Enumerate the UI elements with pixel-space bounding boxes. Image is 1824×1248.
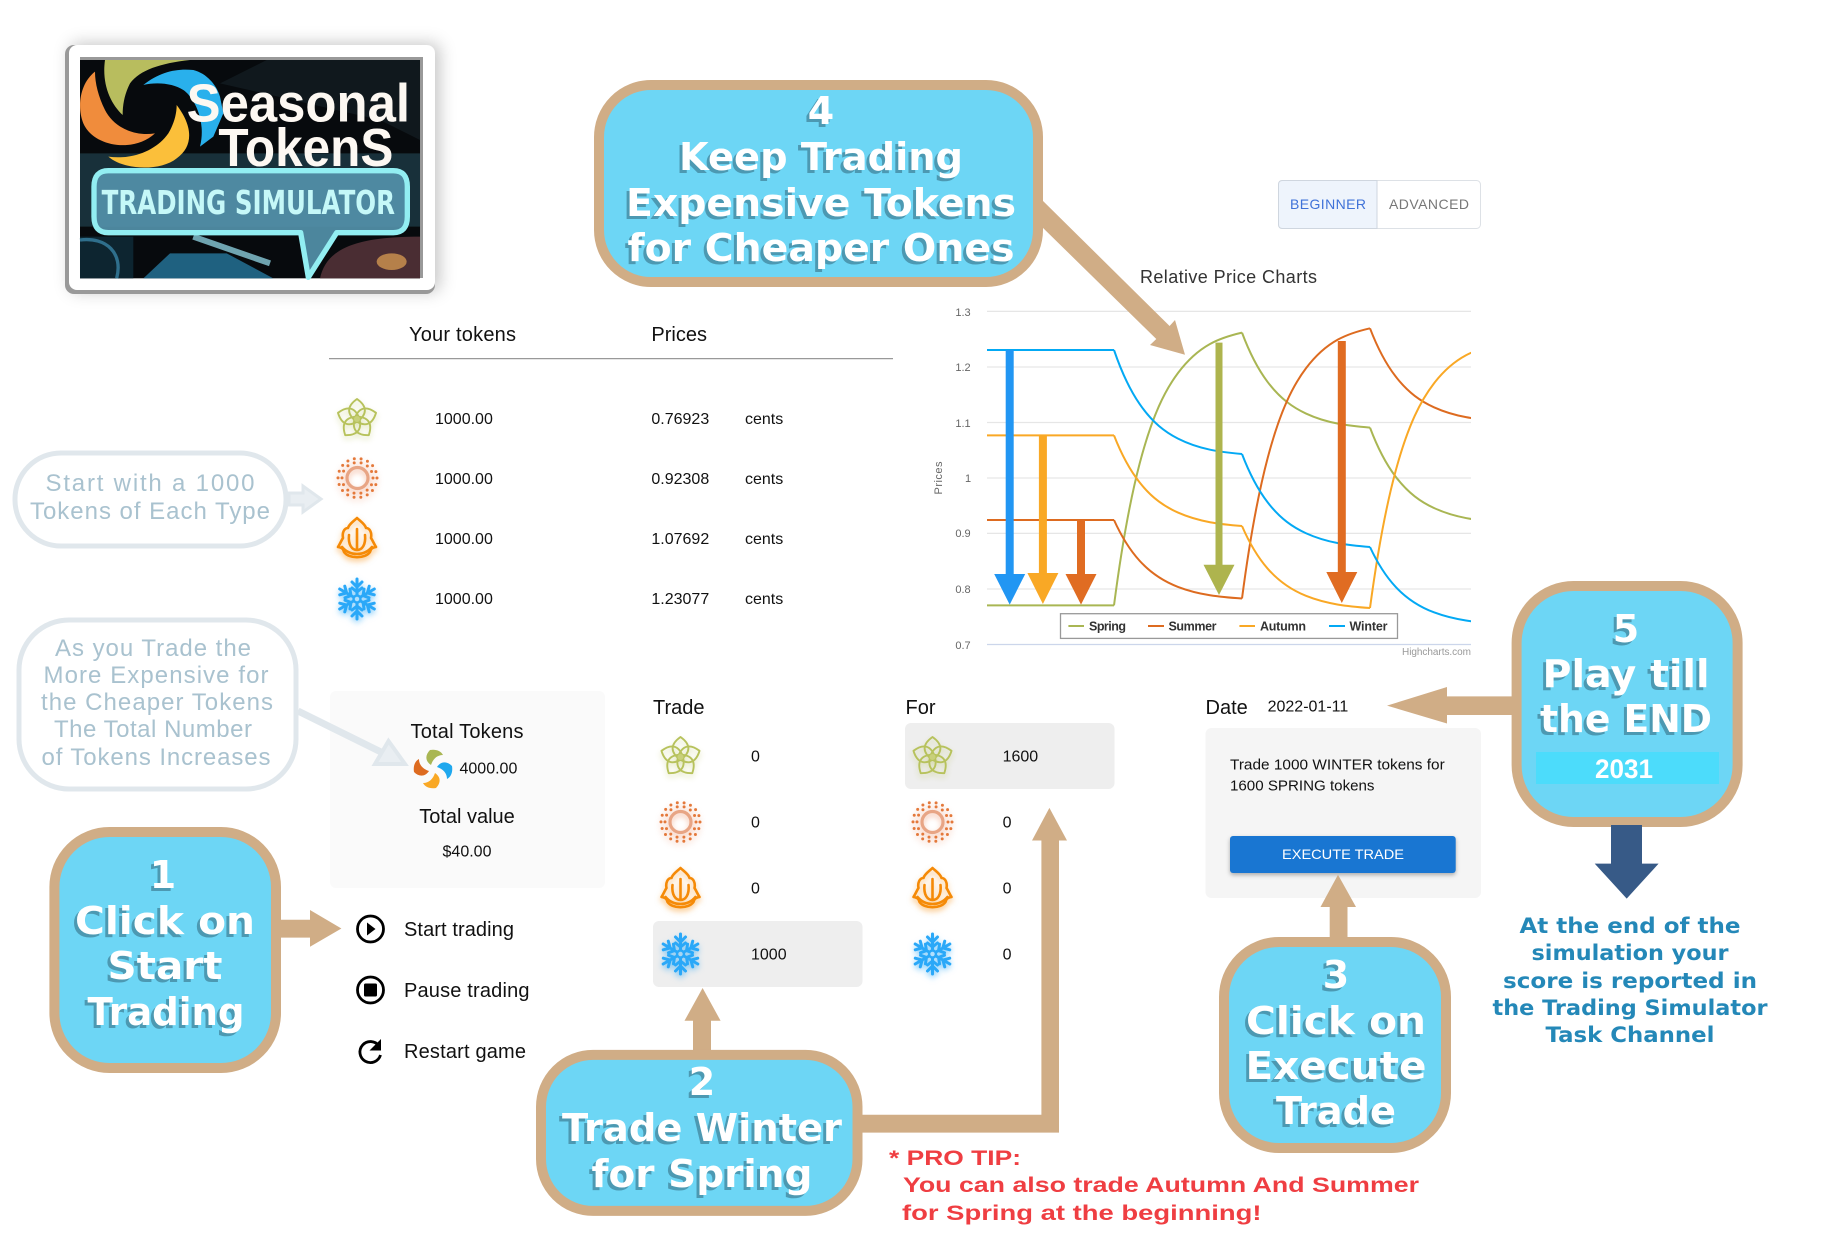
legend: Spring — [1089, 620, 1126, 634]
winter row values: 1000.00 — [435, 591, 493, 608]
box — [1517, 586, 1738, 822]
callout 2 — [541, 1055, 858, 1211]
arrow: summer drop — [1066, 520, 1096, 605]
summer row values: 0.92308 — [651, 471, 709, 488]
callout: start tokens: Tokens of Each Type — [30, 498, 270, 525]
end of simulation note: simulation your — [1532, 941, 1729, 965]
arrow: autumn drop — [1027, 435, 1058, 604]
icon: spring — [659, 737, 702, 778]
winter row values: 1.23077 — [651, 591, 709, 608]
logo wordmark: Seasonal — [187, 75, 410, 134]
callout text: Start — [108, 944, 222, 988]
summer row values: 1000.00 — [435, 471, 493, 488]
autumn row values — [435, 531, 783, 548]
end of simulation note: the Trading Simulator — [1492, 996, 1768, 1020]
arrow: summer peak drop — [1326, 341, 1357, 603]
date row: 2022-01-11 — [1268, 698, 1348, 716]
autumn row values: 1000.00 — [435, 531, 493, 548]
winter line — [987, 350, 1498, 624]
token rows — [336, 399, 783, 619]
execute button: EXECUTE TRADE — [1282, 846, 1404, 862]
chart title: Relative Price Charts — [1140, 267, 1317, 287]
spring row values: 0.76923 — [651, 411, 709, 428]
selected row highlight — [905, 723, 1114, 789]
box — [54, 832, 276, 1068]
callout: total tokens increases — [19, 620, 405, 789]
end of simulation note — [1492, 914, 1768, 1047]
total value amount: $40.00 — [443, 844, 492, 860]
arrow — [289, 486, 321, 512]
callout text: Trading — [88, 990, 244, 1034]
arrow — [298, 711, 405, 764]
arrow: winter drop — [994, 350, 1025, 605]
callout: total tokens increases: More Expensive for — [44, 662, 268, 689]
date row — [1206, 697, 1348, 719]
pro tip: for Spring at the beginning! — [902, 1202, 1262, 1225]
spring line — [987, 333, 1498, 605]
selected row highlight — [653, 921, 862, 987]
card frame — [65, 45, 435, 294]
icon: summer — [338, 458, 377, 498]
game controls — [358, 916, 530, 1063]
for values — [1003, 748, 1038, 964]
spring row values: 1000.00 — [435, 411, 493, 428]
beginner label: BEGINNER — [1290, 196, 1366, 212]
box — [15, 453, 286, 546]
callout text — [562, 1060, 842, 1196]
for values: 1600 — [1003, 748, 1038, 766]
mode toggle — [1278, 180, 1480, 228]
y axis labels: 0.8 — [955, 584, 971, 596]
logo artwork: TokenS — [218, 119, 393, 178]
trade values: 0 — [751, 880, 760, 898]
callout text: Keep Trading — [679, 135, 963, 179]
icon: play — [358, 916, 384, 942]
callout text — [75, 853, 255, 1034]
summer line — [987, 328, 1498, 598]
trade values — [751, 748, 787, 964]
box — [19, 620, 296, 789]
box — [599, 85, 1038, 282]
end of simulation note: Task Channel — [1546, 1023, 1714, 1047]
legend — [1060, 614, 1398, 638]
arrow: spring drop — [1204, 343, 1234, 595]
trade values: 1000 — [751, 946, 787, 964]
text: Start with a 1000 — [46, 470, 254, 497]
trade values: 0 — [751, 814, 760, 832]
execute button — [1230, 836, 1456, 873]
icon: summer — [913, 802, 952, 842]
summer row values — [435, 471, 783, 488]
swirl petals — [104, 60, 190, 115]
callout 4 — [599, 85, 1038, 282]
icon: winter — [337, 579, 377, 619]
spring row values: cents — [745, 411, 783, 428]
spring row values — [435, 411, 783, 428]
for values: 0 — [1003, 814, 1012, 832]
callout text — [626, 89, 1016, 270]
winter row values — [435, 591, 783, 608]
y axis labels: 1.3 — [955, 307, 971, 319]
y axis labels: 0.7 — [955, 640, 971, 652]
for values: 0 — [1003, 880, 1012, 898]
callout 1 — [54, 832, 276, 1068]
callout 5 — [1517, 586, 1738, 822]
end of simulation note: At the end of the — [1520, 914, 1740, 938]
total value label: Total value — [419, 806, 515, 828]
y axis title: Prices — [933, 461, 945, 494]
trade panel — [1206, 728, 1481, 898]
series lines — [987, 328, 1498, 624]
icon: winter — [913, 934, 952, 974]
callout: start tokens — [15, 453, 321, 546]
arrow: step 5 to results — [1595, 825, 1659, 899]
legend: Winter — [1350, 620, 1388, 634]
arrow: step 1 to start trading — [278, 910, 341, 947]
text: As you Trade the — [55, 635, 251, 662]
icon: restart — [360, 1039, 381, 1063]
logo artwork — [80, 60, 420, 278]
autumn line — [987, 344, 1498, 608]
pause trading label: Pause trading — [404, 980, 530, 1002]
callout text: Click on — [1246, 999, 1426, 1043]
box — [1224, 942, 1446, 1148]
table header — [329, 324, 893, 359]
credit: Highcharts.com — [1402, 647, 1471, 658]
y axis labels: 1.1 — [955, 418, 971, 430]
speech bubble — [94, 171, 407, 277]
icon: pause — [358, 977, 384, 1003]
y axis labels: 1.2 — [955, 362, 971, 374]
icon: token logo — [414, 750, 452, 788]
icon: spring — [911, 737, 954, 778]
arrow: step 5 to date — [1387, 687, 1516, 724]
end of simulation note: score is reported in — [1503, 969, 1757, 993]
pro tip — [889, 1147, 1419, 1225]
callout text: 1 — [150, 853, 176, 897]
y axis labels: 0.9 — [955, 528, 971, 540]
arrow: step 4 to chart — [1040, 198, 1185, 355]
callout text — [1246, 953, 1426, 1133]
year bar — [1536, 752, 1719, 784]
icon: autumn — [914, 868, 952, 907]
trade panel: 1600 SPRING tokens — [1230, 778, 1374, 794]
callout text: Trade — [1276, 1089, 1396, 1133]
icon: autumn — [662, 868, 700, 907]
icon: autumn — [338, 518, 376, 557]
icon: summer — [661, 802, 700, 842]
price chart — [933, 307, 1498, 658]
callout: total tokens increases: the Cheaper Tokens — [41, 689, 273, 716]
for values: 0 — [1003, 946, 1012, 964]
callout: total tokens increases: of Tokens Increases — [42, 744, 270, 771]
winter row values: cents — [745, 591, 783, 608]
y axis labels — [955, 307, 971, 652]
trade column — [653, 697, 862, 987]
callout text — [1540, 607, 1712, 741]
callout 3 — [1224, 942, 1446, 1148]
summer row values: cents — [745, 471, 783, 488]
autumn row values: 1.07692 — [651, 531, 709, 548]
callout text: for Spring — [592, 1152, 812, 1196]
arrow: step 2 to for row — [858, 808, 1067, 1133]
callout text: Click on — [75, 899, 255, 943]
arrow: step 2 to trade row — [684, 988, 721, 1055]
trade description: Trade 1000 WINTER tokens for — [1230, 758, 1445, 774]
callout text: 5 — [1613, 607, 1639, 651]
legend: Summer — [1168, 620, 1217, 634]
y axis labels: 1 — [965, 473, 971, 485]
box — [541, 1055, 858, 1211]
pro tip: * PRO TIP: — [889, 1147, 1021, 1170]
callout text: Expensive Tokens — [626, 181, 1016, 225]
trade heading: Trade — [653, 697, 705, 719]
pro tip: You can also trade Autumn And Summer — [903, 1174, 1419, 1197]
callout text: 4 — [808, 89, 834, 133]
logo card — [65, 45, 435, 294]
callout: total tokens increases: The Total Number — [54, 716, 252, 743]
legend: Autumn — [1260, 620, 1306, 634]
icon: spring — [336, 399, 378, 440]
restart game label: Restart game — [404, 1041, 526, 1063]
for column — [905, 697, 1114, 974]
start trading label: Start trading — [404, 919, 514, 941]
autumn row values: cents — [745, 531, 783, 548]
arrow: step 3 to execute button — [1320, 875, 1356, 945]
for heading: For — [906, 697, 936, 719]
table header: Your tokens — [409, 324, 516, 346]
icon: winter — [661, 934, 700, 974]
callout text: the END — [1540, 697, 1712, 741]
trade values: 0 — [751, 748, 760, 766]
date row: Date — [1206, 697, 1248, 719]
table header: Prices — [651, 324, 707, 346]
advanced label: ADVANCED — [1389, 196, 1469, 212]
logo subtitle: TRADING SIMULATOR — [102, 184, 395, 222]
year: 2031 — [1595, 754, 1653, 784]
callout text: 2 — [689, 1060, 715, 1104]
callout text: Play till — [1542, 652, 1710, 696]
callout text: Trade Winter — [562, 1106, 842, 1150]
summary panel — [330, 691, 605, 888]
callout text: 3 — [1323, 953, 1349, 997]
callout text: Execute — [1246, 1044, 1426, 1088]
total tokens label: Total Tokens — [410, 721, 524, 743]
callout text: for Cheaper Ones — [628, 226, 1014, 270]
total tokens value: 4000.00 — [460, 760, 517, 778]
